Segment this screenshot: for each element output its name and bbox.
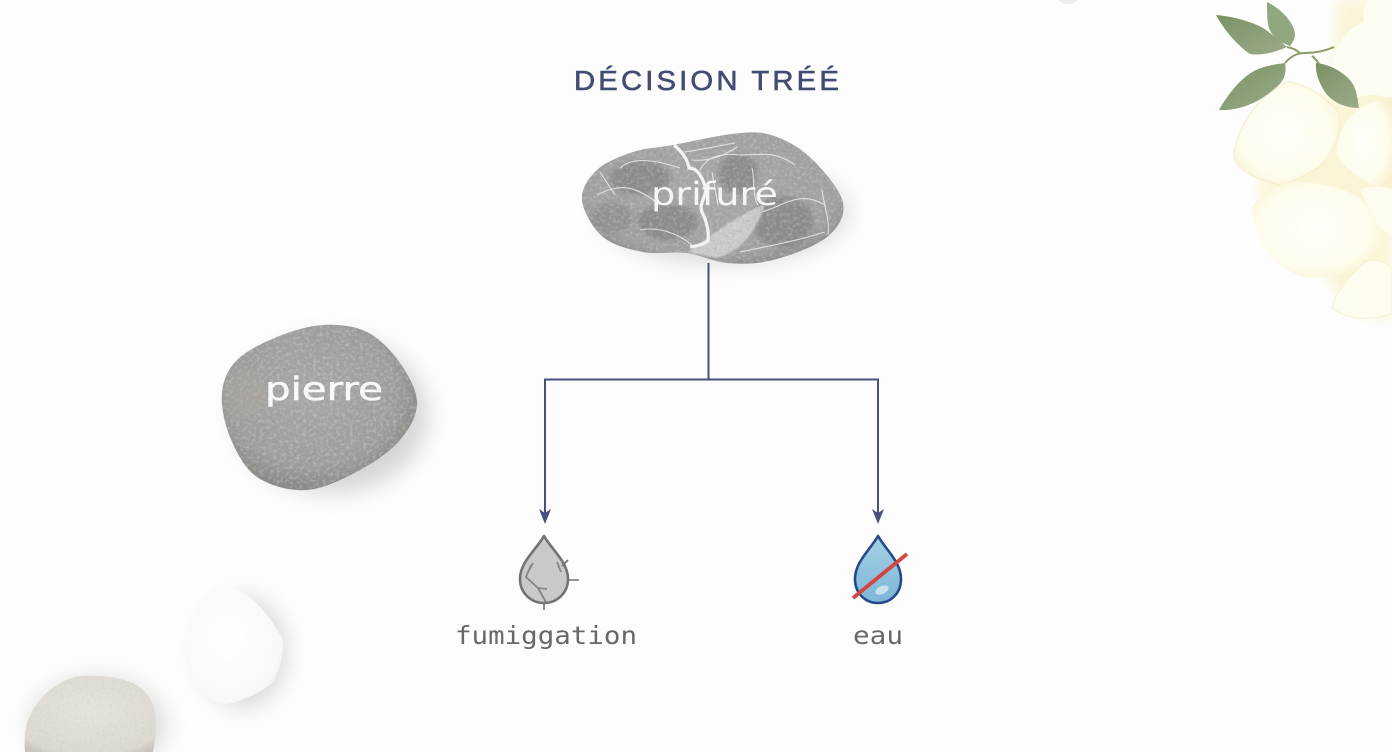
- title: DÉCISION TRÉÉ: [574, 65, 842, 96]
- trunk line: [708, 263, 710, 379]
- stone: prifuré: [580, 130, 848, 266]
- beige stone: [20, 670, 166, 752]
- label: fumiggation: fumiggation: [455, 621, 637, 650]
- decorative white petal top edge: [1057, 0, 1079, 4]
- stone: pierre: pierre: [265, 370, 383, 408]
- flower with leaves: [1216, 0, 1392, 322]
- horizontal branch with two drops: [545, 380, 878, 515]
- connector tree: [545, 263, 878, 515]
- arrowhead: left: [539, 509, 551, 524]
- stone: pierre: [220, 323, 428, 493]
- flower petals: [1234, 0, 1392, 322]
- white stone: [183, 584, 287, 708]
- stone: prifuré: prifuré: [651, 175, 778, 213]
- arrowhead: right: [872, 509, 884, 524]
- icon: water drop crossed out: [853, 536, 907, 603]
- label: eau: eau: [853, 621, 903, 650]
- icon: cracked stone drop: [520, 536, 579, 610]
- leaves and stem: [1216, 2, 1359, 110]
